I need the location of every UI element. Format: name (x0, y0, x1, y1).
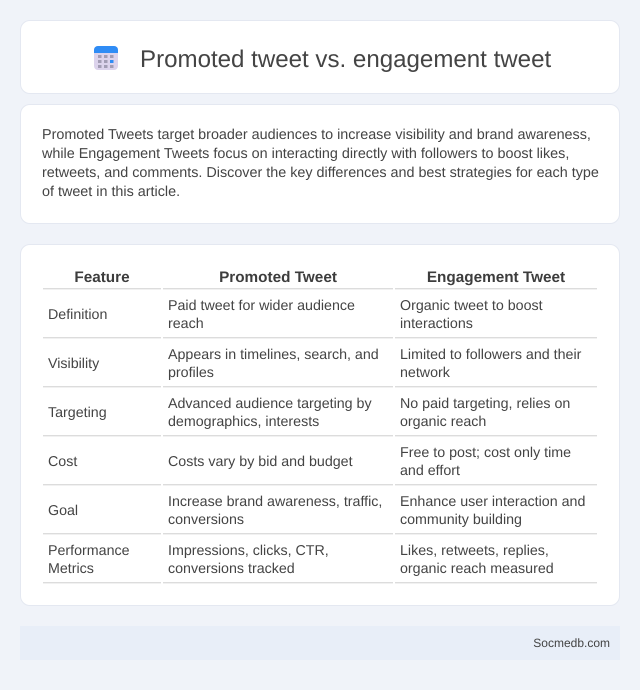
comparison table: Performance (48, 543, 130, 559)
comparison table: Definition (48, 307, 107, 323)
comparison table: profiles (168, 365, 214, 381)
comparison table: Limited to followers and their (400, 347, 581, 363)
footer: Socmedb.com (533, 636, 610, 650)
comparison table: Likes, retweets, replies, (400, 543, 549, 559)
comparison table: Increase brand awareness, traffic, (168, 494, 382, 510)
intro text (42, 127, 599, 200)
comparison table: Advanced audience targeting by (168, 396, 372, 412)
comparison table: Promoted Tweet (219, 269, 337, 286)
comparison table: Targeting (48, 405, 107, 421)
intro text: retweets, and comments. Discover the key differences and best strategies for each type (42, 165, 599, 181)
comparison table: Enhance user interaction and (400, 494, 585, 510)
intro card (20, 104, 620, 224)
comparison table: demographics, interests (168, 414, 319, 430)
comparison table: Costs vary by bid and budget (168, 454, 353, 470)
comparison table: Cost (48, 454, 77, 470)
comparison table: No paid targeting, relies on (400, 396, 570, 412)
comparison table: Free to post; cost only time (400, 445, 571, 461)
icon: calendar (94, 46, 118, 70)
comparison table: Metrics (48, 561, 94, 577)
comparison table: community building (400, 512, 522, 528)
comparison table: conversions (168, 512, 244, 528)
footer (20, 626, 620, 660)
comparison table: organic reach (400, 414, 486, 430)
intro text: Promoted Tweets target broader audiences to increase visibility and brand awareness, (42, 127, 591, 143)
comparison table: Impressions, clicks, CTR, (168, 543, 329, 559)
comparison table: reach (168, 316, 204, 332)
comparison table: Feature (74, 269, 130, 286)
intro text: while Engagement Tweets focus on interacting directly with followers to boost likes, (42, 146, 569, 162)
comparison table: Visibility (48, 356, 99, 372)
intro text: of tweet in this article. (42, 184, 180, 200)
comparison table: Appears in timelines, search, and (168, 347, 379, 363)
comparison table: and effort (400, 463, 460, 479)
comparison table: Engagement Tweet (427, 269, 565, 286)
comparison table: conversions tracked (168, 561, 295, 577)
table card (20, 244, 620, 606)
comparison table: interactions (400, 316, 473, 332)
comparison table: network (400, 365, 450, 381)
title card (20, 20, 620, 94)
comparison table: organic reach measured (400, 561, 554, 577)
comparison table: Goal (48, 503, 78, 519)
comparison table: Paid tweet for wider audience (168, 298, 355, 314)
title: Promoted tweet vs. engagement tweet (140, 46, 551, 73)
comparison table: Organic tweet to boost (400, 298, 543, 314)
